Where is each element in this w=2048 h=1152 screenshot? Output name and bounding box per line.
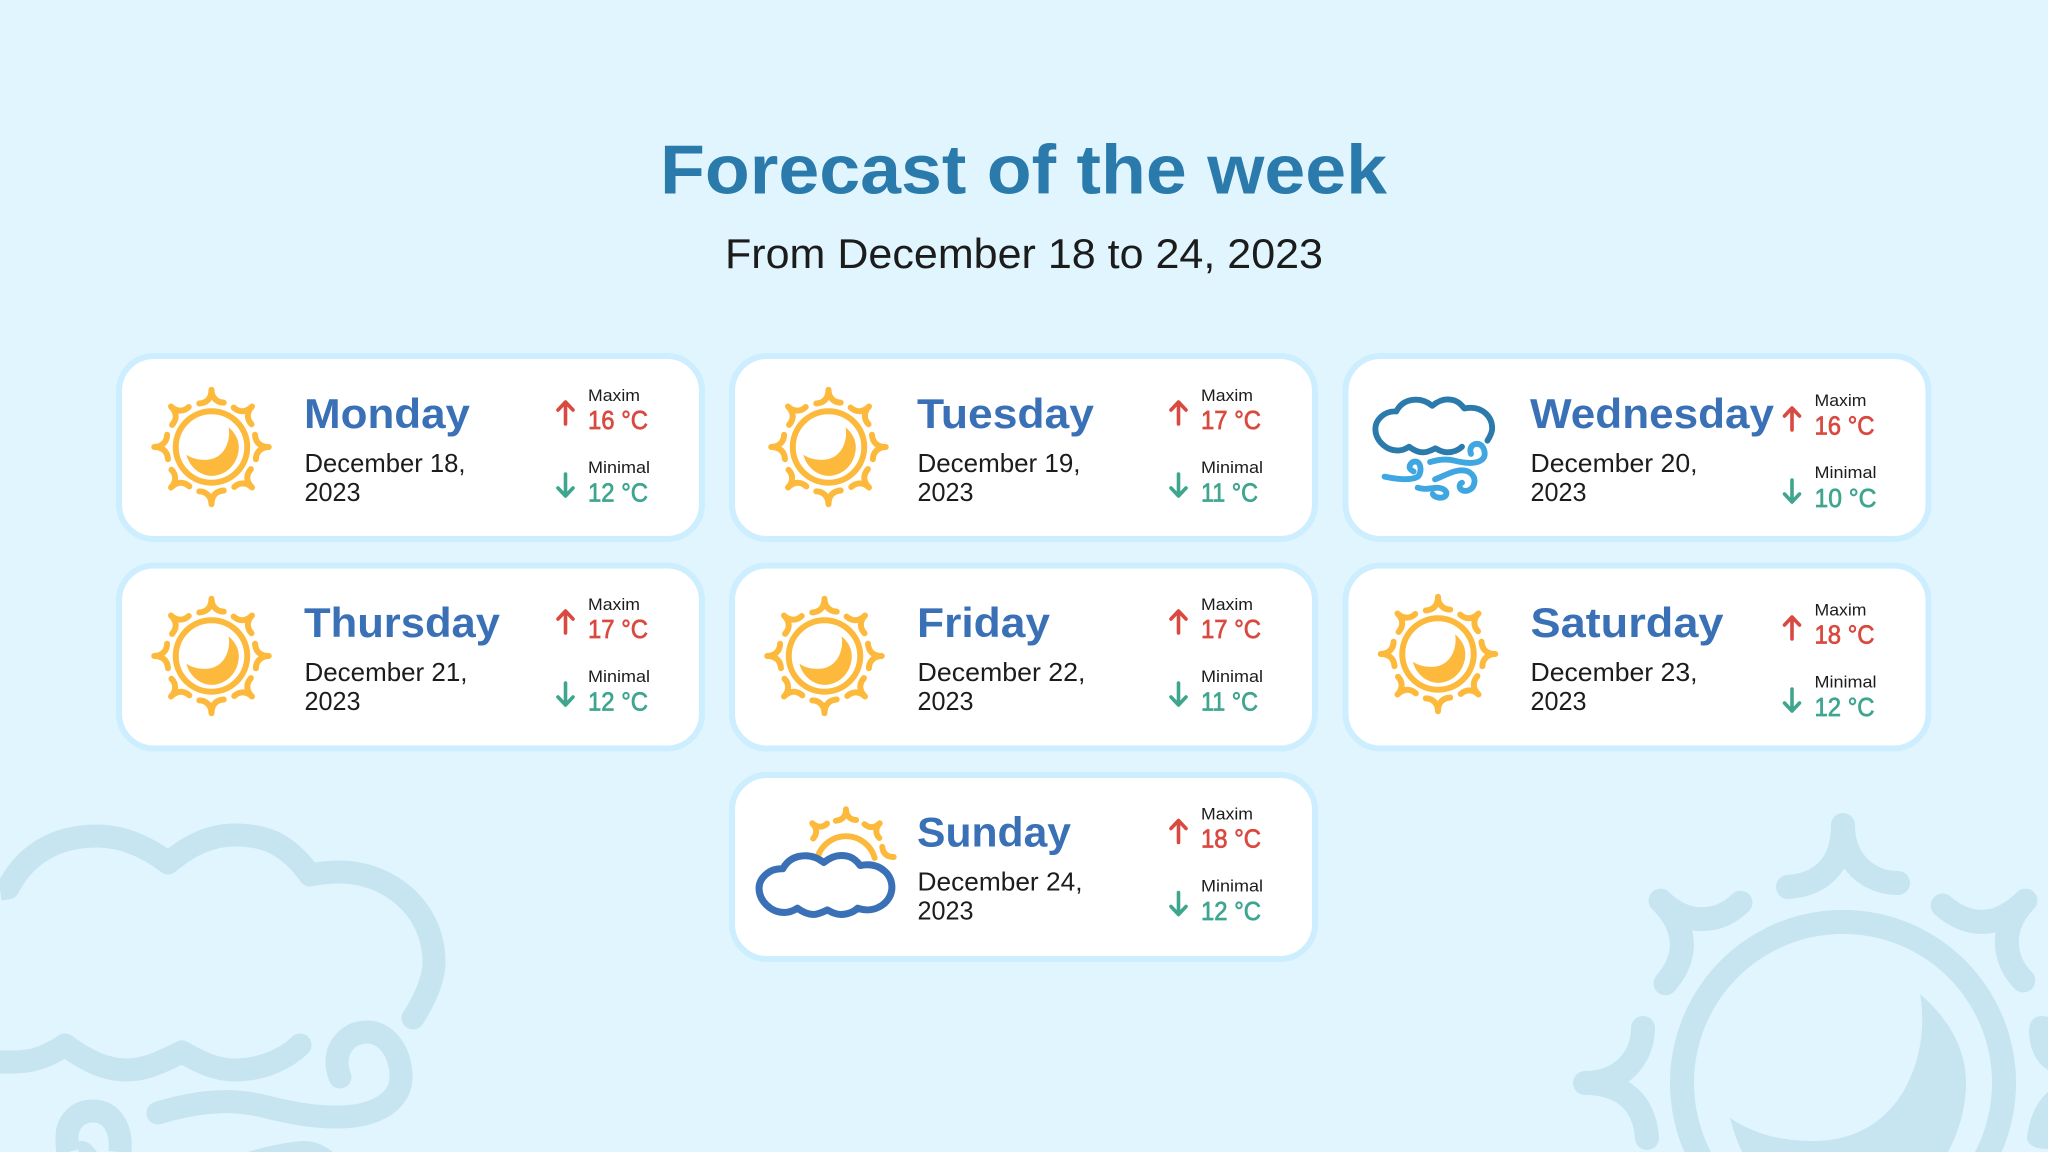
minimum label: Minimal [1201, 458, 1263, 477]
subtitle: From December 18 to 24, 2023 [725, 230, 1323, 277]
minimum temperature: 12 °C [588, 478, 648, 508]
date: 2023 [1530, 686, 1586, 716]
minimum temperature: 11 °C [1201, 686, 1258, 716]
arrow: down [1784, 689, 1800, 711]
icon: sun [154, 599, 269, 713]
maximum temperature: 17 °C [588, 614, 648, 644]
icon: wind cloud [1375, 399, 1492, 498]
maximum temperature: 18 °C [1814, 620, 1874, 650]
background icon: sun [1585, 825, 2048, 1152]
date: December 18, [304, 448, 466, 478]
arrow: up [1784, 617, 1800, 639]
arrow: down [1171, 474, 1186, 496]
arrow: down [558, 683, 573, 705]
minimum label: Minimal [1201, 667, 1263, 686]
date: December 22, [918, 657, 1086, 687]
panel: Tuesday [732, 356, 1315, 539]
maximum label: Maxim [1814, 391, 1866, 410]
minimum temperature: 12 °C [1201, 896, 1261, 926]
arrow: down [558, 474, 573, 496]
day name: Saturday [1530, 599, 1724, 646]
icon: sun [1381, 597, 1495, 711]
date: December 21, [304, 657, 468, 687]
panel: Monday [119, 356, 702, 539]
date: 2023 [918, 686, 974, 716]
date: 2023 [918, 477, 974, 507]
maximum temperature: 16 °C [1814, 410, 1874, 440]
date: 2023 [918, 896, 974, 926]
minimum temperature: 12 °C [588, 686, 648, 716]
day name: Friday [917, 599, 1051, 646]
maximum temperature: 18 °C [1201, 824, 1261, 854]
arrow: up [1171, 402, 1186, 424]
date: 2023 [304, 686, 360, 716]
day name: Sunday [917, 808, 1072, 856]
minimum label: Minimal [1814, 672, 1876, 692]
arrow: up [1171, 820, 1186, 842]
maximum temperature: 17 °C [1201, 614, 1261, 644]
minimum temperature: 12 °C [1814, 692, 1874, 722]
minimum label: Minimal [1201, 876, 1263, 896]
minimum label: Minimal [1814, 463, 1876, 482]
panel: Wednesday [1346, 356, 1928, 539]
panel: Saturday [1346, 566, 1928, 748]
minimum temperature: 10 °C [1814, 483, 1876, 513]
panel: Sunday [732, 775, 1315, 959]
arrow: down [1171, 683, 1186, 705]
day name: Tuesday [917, 390, 1095, 437]
maximum temperature: 17 °C [1201, 405, 1261, 435]
day name: Thursday [304, 599, 501, 646]
minimum label: Minimal [588, 458, 650, 477]
minimum temperature: 11 °C [1201, 478, 1258, 508]
arrow: up [1171, 611, 1186, 633]
maximum label: Maxim [588, 595, 640, 614]
maximum temperature: 16 °C [588, 405, 648, 435]
arrow: up [558, 402, 573, 424]
arrow: down [1784, 480, 1800, 502]
maximum label: Maxim [1201, 595, 1253, 614]
panel: Friday [732, 566, 1315, 748]
date: December 19, [918, 448, 1080, 478]
icon: partly cloudy [759, 809, 894, 914]
maximum label: Maxim [1201, 386, 1253, 405]
arrow: up [1784, 408, 1800, 430]
arrow: down [1171, 892, 1186, 914]
minimum label: Minimal [588, 667, 650, 686]
maximum label: Maxim [1814, 600, 1866, 620]
title: Forecast of the week [660, 130, 1387, 208]
maximum label: Maxim [588, 386, 640, 405]
background icon: wind cloud [0, 835, 434, 1152]
date: December 20, [1530, 448, 1698, 478]
icon: sun [767, 599, 882, 713]
icon: sun [154, 390, 269, 504]
date: 2023 [304, 477, 360, 507]
panel: Thursday [119, 566, 702, 748]
date: 2023 [1530, 477, 1586, 507]
day name: Monday [304, 390, 471, 437]
maximum label: Maxim [1201, 804, 1253, 824]
date: December 23, [1530, 657, 1698, 687]
day name: Wednesday [1530, 390, 1775, 437]
arrow: up [558, 611, 573, 633]
date: December 24, [918, 866, 1082, 896]
icon: sun [771, 390, 886, 504]
